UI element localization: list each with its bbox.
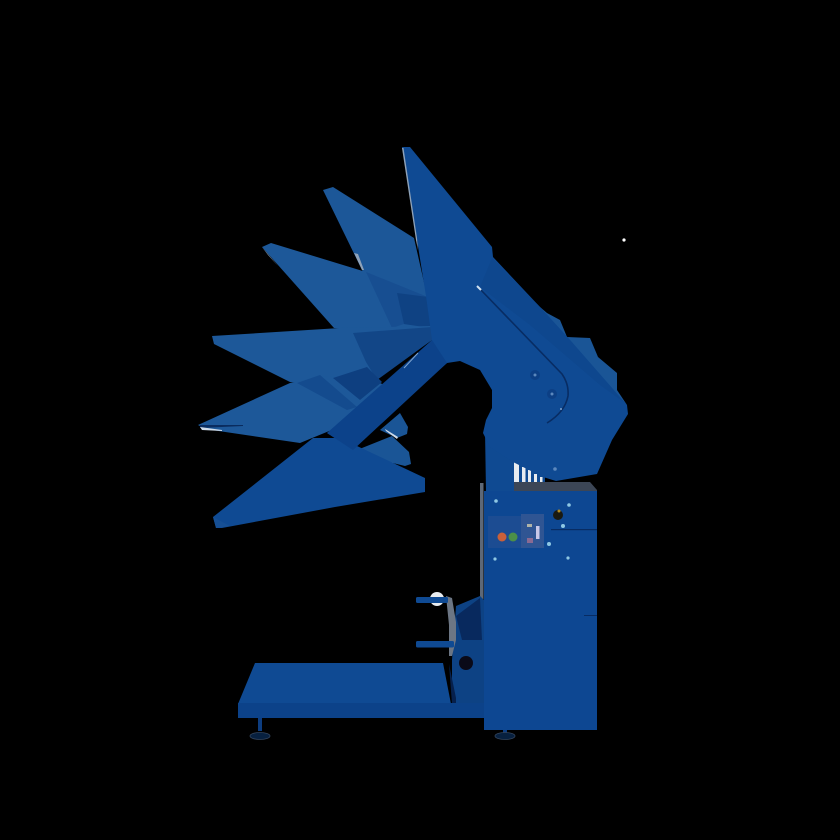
- black rotary knob: [553, 510, 563, 520]
- lower arm brace: [327, 340, 447, 450]
- fan blade 5: [198, 367, 385, 443]
- small rear fins: [357, 413, 411, 466]
- small white speck: [622, 238, 626, 242]
- right foot: [495, 730, 515, 740]
- slot end highlight: [477, 286, 481, 290]
- fan blade 6 (lowest): [213, 438, 425, 528]
- lower arm bracket: [446, 596, 484, 718]
- main arm and top blade: [327, 147, 628, 481]
- fan blade 2: [323, 187, 428, 320]
- rear rounded bumps on arm: [540, 307, 627, 405]
- cabinet: [480, 483, 597, 730]
- screws: [493, 499, 571, 561]
- lower hand lever: [416, 641, 454, 648]
- hole in bracket: [459, 656, 473, 670]
- cabinet top plate: [514, 482, 597, 492]
- fan blade 4: [212, 326, 432, 385]
- upper hand lever: [416, 592, 448, 606]
- cabinet panel seams: [551, 529, 597, 530]
- darker arm cover: [480, 258, 625, 403]
- arm slot line: [480, 289, 568, 423]
- cabinet column neck: [485, 430, 545, 492]
- edge highlight on top blade: [402, 148, 418, 250]
- cabinet left edge strip: [480, 483, 484, 613]
- brace highlight: [404, 353, 418, 368]
- fan blade 3: [262, 243, 431, 334]
- bolts on arm: [530, 370, 540, 380]
- slot vents under arm: [514, 462, 542, 482]
- left foot: [250, 718, 270, 740]
- base platform: [238, 663, 484, 718]
- control panel: [488, 514, 544, 548]
